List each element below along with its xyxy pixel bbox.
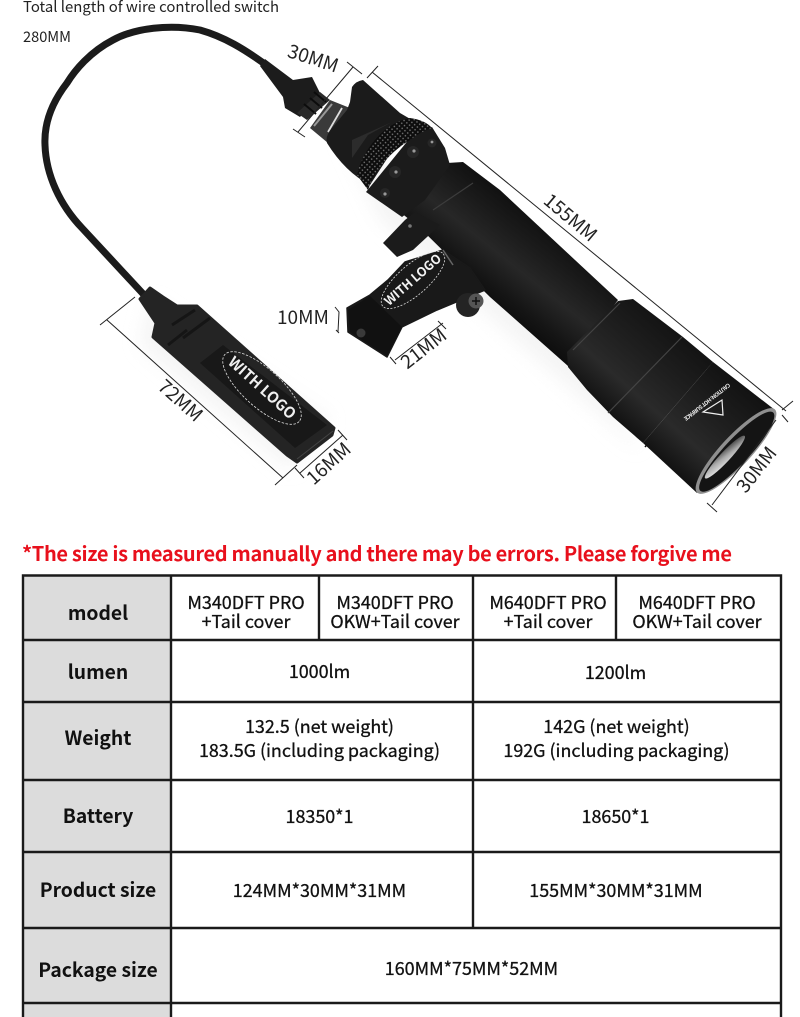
row: package size: 160MM*75MM*52MM <box>385 955 558 981</box>
remote switch pad <box>140 288 334 462</box>
row: weight <box>65 713 730 763</box>
head caution marking: CAUTION: HOT SURFACE <box>682 381 732 423</box>
dimension: 16MM pad width: 16MM <box>300 435 356 490</box>
row: model: +Tail cover <box>504 608 592 634</box>
soft floor shadow <box>140 130 640 470</box>
dimension: 155MM body length: 155MM <box>538 186 604 247</box>
specification table <box>23 575 781 1017</box>
row: battery: 18350*1 <box>286 803 353 829</box>
row: model: M340DFT PRO <box>336 589 454 615</box>
flashlight main body <box>400 152 618 366</box>
dimension: 10MM mount height: 10MM <box>277 303 329 330</box>
dimension: 155MM body length <box>367 66 793 411</box>
mount logo <box>373 242 453 318</box>
row: battery: Battery <box>63 801 133 829</box>
row: weight: 183.5G (including packaging) <box>199 737 440 763</box>
row: model: M640DFT PRO <box>638 589 756 615</box>
flashlight head <box>643 362 775 493</box>
mount clamp <box>347 212 485 357</box>
disclaimer heading: *The size is measured manually and there may be errors. Please forgive me <box>22 538 732 567</box>
row: model <box>68 589 762 634</box>
row: lumen: lumen <box>68 657 128 685</box>
flashlight bezel <box>567 299 713 443</box>
row: model: M340DFT PRO <box>187 589 305 615</box>
row: product size: 124MM*30MM*31MM <box>233 877 406 903</box>
dimension: 72MM pad length: 72MM <box>153 372 209 427</box>
row: lumen <box>68 657 646 685</box>
row: model: OKW+Tail cover <box>632 608 762 634</box>
row: weight: Weight <box>65 723 131 751</box>
row: package size <box>38 955 558 983</box>
row: package size: Package size <box>38 955 158 983</box>
row: product size <box>40 875 703 903</box>
row: model: model <box>68 598 128 626</box>
table grid <box>23 575 781 1017</box>
lens <box>686 399 786 503</box>
dimension: 30MM head width <box>707 415 788 512</box>
wire length note <box>23 0 279 47</box>
dimension: 30MM tail width: 30MM <box>285 37 342 78</box>
mount logo: WITH LOGO <box>379 249 445 309</box>
row: model: M640DFT PRO <box>489 589 607 615</box>
row: weight: 192G (including packaging) <box>503 737 730 763</box>
wire length note: 280MM <box>23 26 71 47</box>
control collar with studs <box>366 127 450 217</box>
row: lumen: 1000lm <box>289 658 350 684</box>
knurled ring <box>357 118 432 190</box>
row: weight: 142G (net weight) <box>543 713 690 739</box>
switch cable <box>45 27 262 297</box>
row: battery: 18650*1 <box>582 803 649 829</box>
row: model: OKW+Tail cover <box>330 608 460 634</box>
row: weight: 132.5 (net weight) <box>245 713 394 739</box>
dimension: 72MM pad length <box>100 297 297 485</box>
row: battery <box>63 801 649 829</box>
remote switch pad: WITH LOGO <box>224 351 301 424</box>
row: model: +Tail cover <box>202 608 290 634</box>
mount screw <box>456 293 484 317</box>
dimension: 30MM tail width <box>285 37 362 137</box>
row: lumen: 1200lm <box>585 659 646 685</box>
dimension: 30MM head width: 30MM <box>729 440 782 498</box>
header column shading <box>23 575 171 1017</box>
product photo: flashlight with remote switch <box>45 27 786 503</box>
flashlight tail cap <box>327 80 412 185</box>
row: product size: 155MM*30MM*31MM <box>529 877 703 903</box>
cable connector <box>260 59 350 143</box>
row: product size: Product size <box>40 875 156 903</box>
dimension: 21MM mount length: 21MM <box>394 321 452 374</box>
